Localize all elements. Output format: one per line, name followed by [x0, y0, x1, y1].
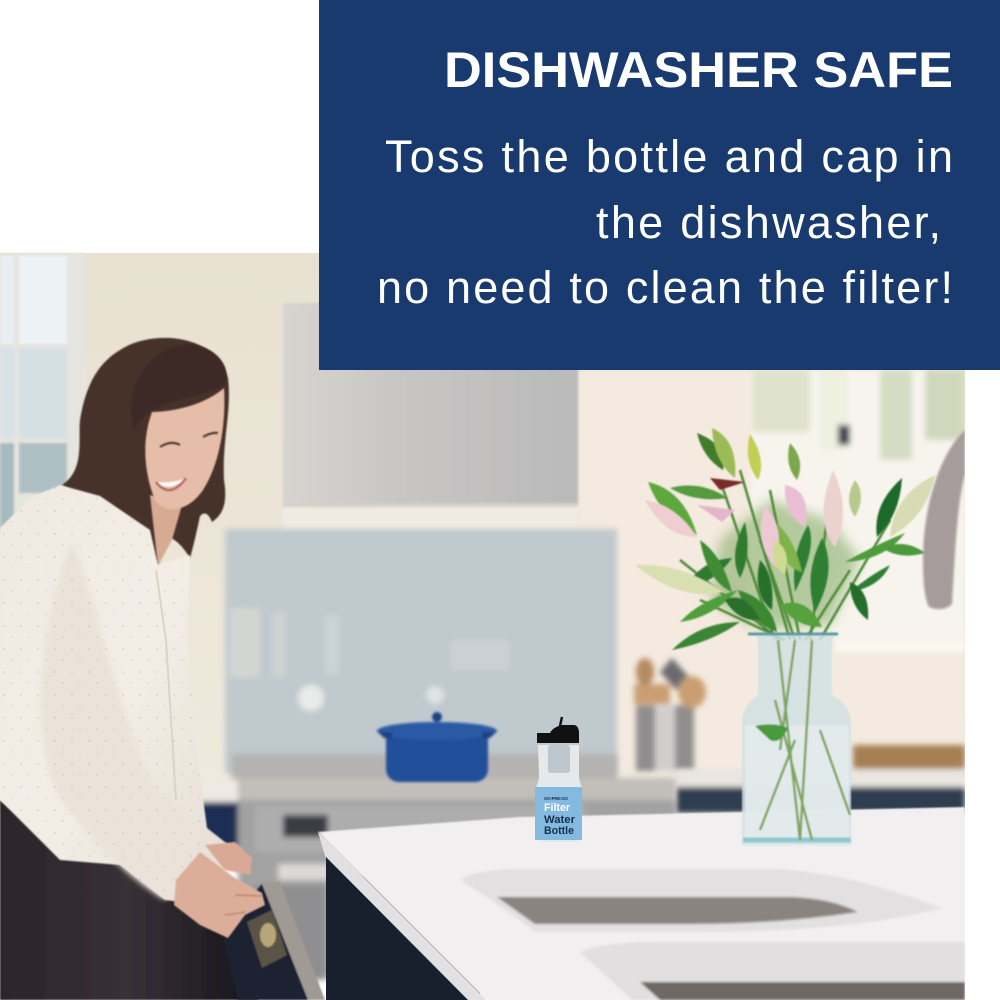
face and neck — [145, 388, 224, 566]
heading: DISHWASHER SAFE — [444, 42, 953, 98]
sweater — [0, 485, 235, 905]
utensil crock — [634, 658, 706, 771]
lily buds — [635, 470, 935, 594]
blue pot — [377, 712, 497, 782]
product: filter water bottle — [535, 717, 582, 842]
label: Water — [544, 814, 576, 826]
sink one — [460, 869, 942, 932]
label: Filter — [544, 802, 571, 814]
right window — [750, 370, 965, 640]
window ledge and cutting board — [676, 640, 965, 813]
hair back — [62, 338, 229, 566]
label — [535, 787, 582, 840]
white margin right — [965, 370, 1000, 1000]
left window — [0, 253, 85, 543]
body text: no need to clean the filter! — [377, 262, 953, 313]
cap — [537, 725, 579, 743]
sleeve shadow — [41, 540, 203, 900]
speckle — [0, 485, 207, 905]
bottle body — [536, 745, 582, 842]
label: Bottle — [544, 825, 574, 837]
countertop — [318, 807, 965, 1000]
hands — [174, 842, 265, 938]
flowers and vase — [635, 428, 935, 845]
backsplash — [225, 529, 617, 774]
stems — [680, 470, 890, 640]
smile — [156, 478, 186, 487]
vase — [742, 634, 851, 845]
label: GO-PRE-GO — [544, 796, 568, 801]
inner filter — [548, 745, 570, 773]
body text — [377, 131, 953, 313]
trousers — [0, 800, 258, 1000]
photo: kitchen background — [0, 253, 965, 980]
right wall — [578, 370, 965, 770]
island counter — [318, 807, 965, 1000]
leaves — [648, 428, 925, 650]
island base — [326, 850, 480, 1000]
back wall — [0, 253, 965, 813]
sink two — [580, 942, 965, 1000]
dishwasher door — [222, 882, 325, 1000]
stove — [196, 754, 676, 980]
hair front — [131, 344, 227, 430]
foliage mass — [710, 500, 860, 630]
spout — [560, 717, 562, 726]
body text: Toss the bottle and cap in — [385, 131, 953, 182]
range hood — [283, 303, 578, 540]
sink tap — [923, 430, 965, 609]
body text: the dishwasher, — [596, 197, 941, 248]
woman — [0, 338, 325, 1000]
panel: headline banner — [319, 0, 1000, 370]
